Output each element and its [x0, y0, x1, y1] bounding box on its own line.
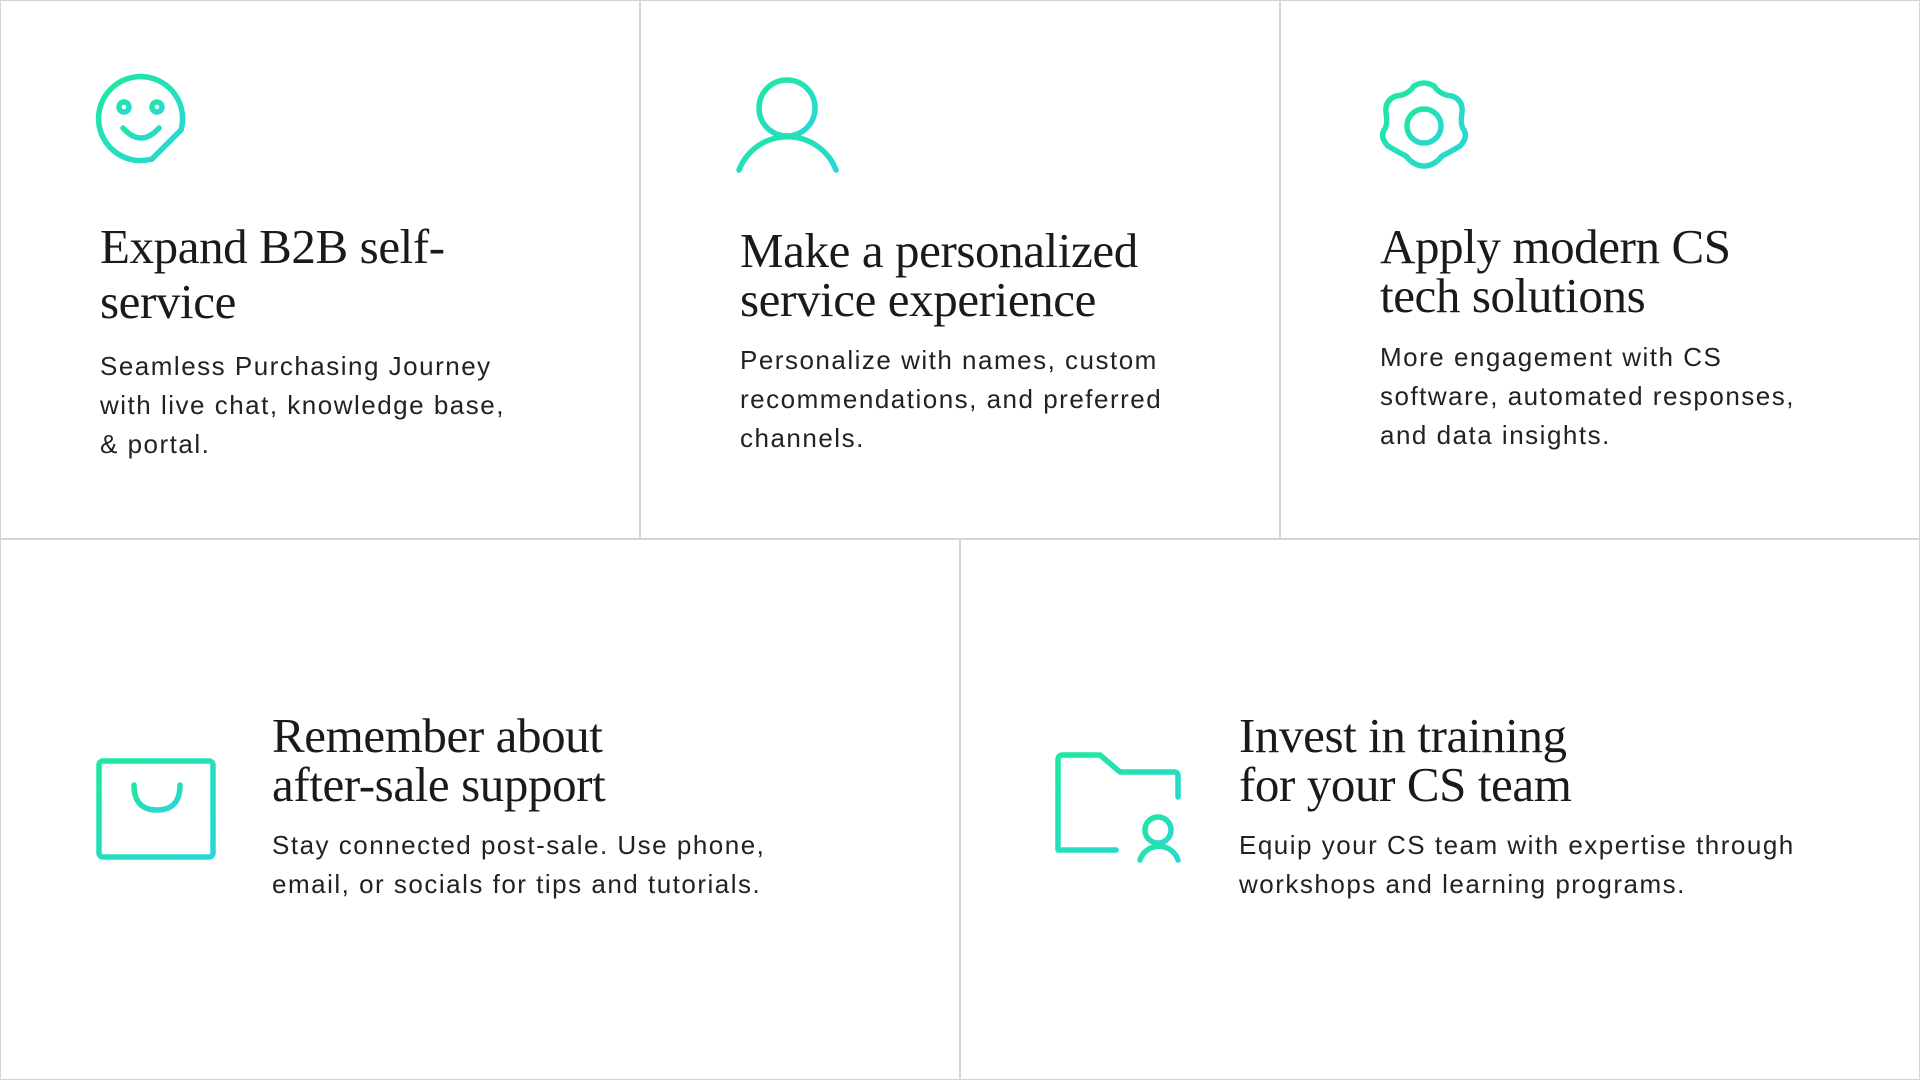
panel: CS tech	[1380, 219, 1795, 450]
heading	[272, 708, 606, 812]
text block	[100, 351, 505, 459]
text block: Stay connected post-sale. Use phone,	[272, 830, 765, 860]
heading: after-sale support	[272, 757, 605, 812]
text block: recommendations, and preferred	[740, 384, 1162, 414]
text block: channels.	[740, 423, 865, 453]
text block: email, or socials for tips and tutorials.	[272, 869, 761, 899]
text block	[1239, 830, 1795, 899]
text block: Equip your CS team with expertise through	[1239, 830, 1795, 860]
icon: smiley	[99, 77, 183, 161]
heading	[1380, 219, 1731, 323]
heading: tech solutions	[1380, 268, 1645, 323]
heading: service	[100, 274, 236, 329]
text block	[272, 830, 765, 899]
heading: service experience	[740, 272, 1096, 327]
heading: Apply modern CS	[1380, 219, 1731, 274]
text block: software, automated responses,	[1380, 381, 1795, 411]
text block: with live chat, knowledge base,	[100, 390, 505, 420]
text block	[740, 345, 1162, 453]
icon: folder with person	[1058, 755, 1178, 860]
panel: training	[1239, 708, 1795, 899]
heading: Remember about	[272, 708, 602, 763]
text block: and data insights.	[1380, 420, 1611, 450]
panel: after-sale	[272, 708, 765, 899]
heading: Expand B2B self-	[100, 219, 445, 274]
text block: Personalize with names, custom	[740, 345, 1158, 375]
icon: shopping bag	[99, 761, 213, 857]
icon: person	[739, 80, 836, 170]
heading	[100, 219, 445, 329]
panel: expand self-service	[100, 219, 505, 459]
text block	[1380, 342, 1795, 450]
panel: personalized	[740, 223, 1162, 453]
text block: More engagement with CS	[1380, 342, 1722, 372]
heading	[740, 223, 1138, 327]
heading: Make a personalized	[740, 223, 1138, 278]
heading	[1239, 708, 1572, 812]
text block: & portal.	[100, 429, 210, 459]
heading: Invest in training	[1239, 708, 1567, 763]
icon: gear	[1383, 83, 1465, 166]
text block: workshops and learning programs.	[1239, 869, 1686, 899]
text block: Seamless Purchasing Journey	[100, 351, 492, 381]
heading: for your CS team	[1239, 757, 1571, 812]
